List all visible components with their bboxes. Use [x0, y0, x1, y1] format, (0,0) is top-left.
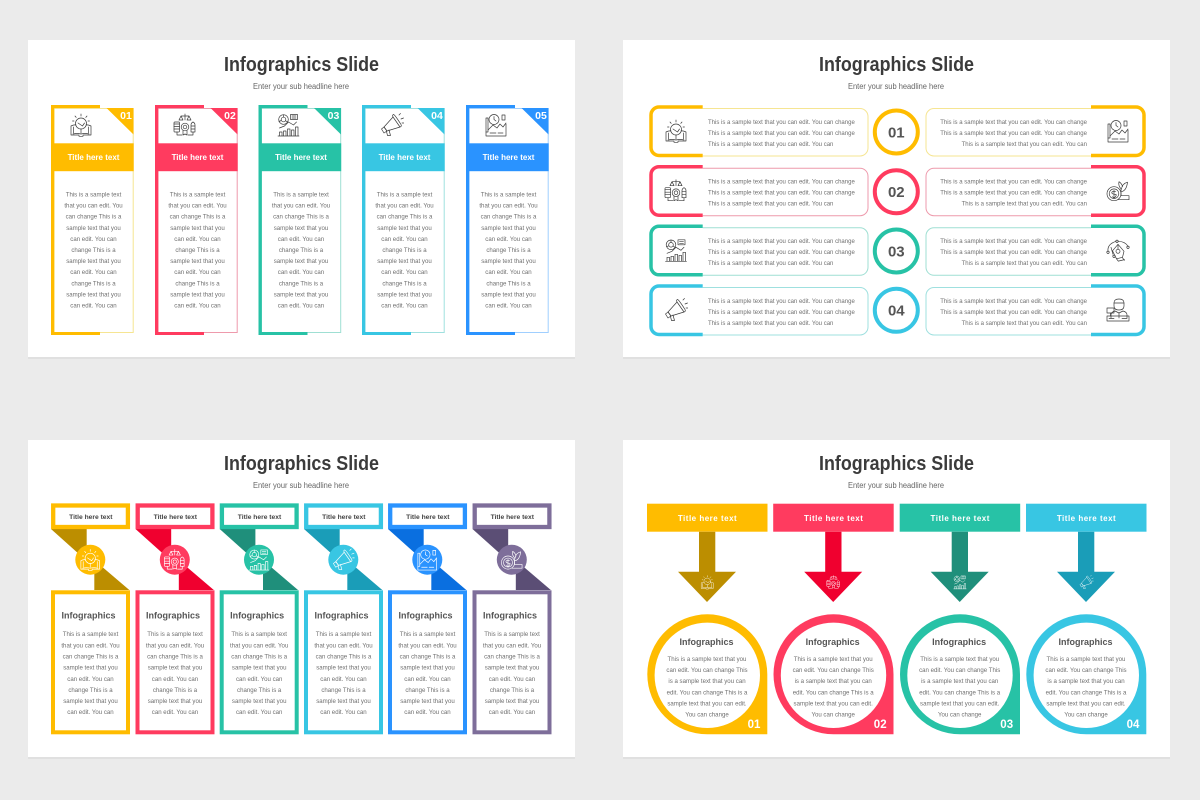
- card 03: that you can edit. You: [272, 203, 330, 210]
- column 1: sample text that you: [63, 698, 118, 705]
- left row 01: This is a sample text that you can edit. You can: [708, 142, 833, 148]
- column 3: sample text that you: [232, 665, 286, 672]
- card 02: [155, 105, 238, 335]
- card 05: change This is a: [486, 280, 531, 287]
- card 05: [466, 105, 549, 335]
- card 03: can edit. You can: [278, 236, 324, 243]
- card 01: sample text that you: [66, 291, 121, 298]
- right row 03: This is a sample text that you can edit. You can change: [940, 239, 1088, 245]
- column 5: Infographics: [398, 610, 453, 620]
- number circle 01: [875, 110, 918, 154]
- number circle 01: 01: [888, 124, 905, 141]
- left row 04: This is a sample text that you can edit. You can change: [708, 299, 855, 305]
- card 04: [362, 105, 445, 335]
- card 05: sample text that you: [481, 258, 536, 265]
- column 3: Title here text: [238, 514, 282, 521]
- card 03: can edit. You can: [278, 302, 324, 310]
- left row 01: This is a sample text that you can edit. You can change: [708, 120, 855, 126]
- column 6: [472, 506, 551, 732]
- card 02: change This is a: [175, 247, 220, 254]
- card 03: sample text that you: [274, 291, 328, 298]
- column 2: sample text that you: [148, 665, 202, 672]
- card 03: This is a sample text: [273, 192, 329, 198]
- column 4: Infographics: [314, 610, 369, 620]
- card 02: sample text that you: [170, 291, 225, 298]
- column 02: This is a sample text that you: [794, 656, 873, 663]
- column 04: 04: [1127, 719, 1140, 731]
- column 04: This is a sample text that you: [1047, 656, 1125, 663]
- column 6: This is a sample text: [484, 631, 540, 638]
- card 02: sample text that you: [170, 225, 225, 232]
- column 03: sample text that you can edit.: [920, 700, 1000, 708]
- card 02: Title here text: [172, 153, 224, 162]
- card 01: can edit. You can: [70, 302, 117, 310]
- card 04: can change This is a: [377, 214, 433, 221]
- right row 03: This is a sample text that you can edit. You can: [962, 261, 1087, 267]
- card 03: can edit. You can: [278, 269, 324, 276]
- right row 04: This is a sample text that you can edit. You can change: [940, 310, 1088, 316]
- sub headline: Enter your sub headline here: [848, 481, 945, 490]
- number circle 03: [875, 230, 918, 272]
- card 04: sample text that you: [377, 258, 432, 265]
- column 2: change This is a: [153, 687, 198, 694]
- panel: five vertical cards: [28, 40, 575, 359]
- card 01: can change This is a: [66, 214, 122, 221]
- sub headline: Enter your sub headline here: [848, 82, 945, 91]
- column 6: can edit. You can: [489, 709, 535, 716]
- card 05: can edit. You can: [485, 269, 532, 276]
- column 03: edit. You can change This is a: [919, 690, 1001, 696]
- column 3: can edit. You can: [236, 709, 282, 716]
- column 02: sample text that you can edit.: [794, 700, 873, 708]
- column 4: [304, 506, 382, 732]
- column 02: [773, 504, 894, 734]
- column 2: [136, 506, 214, 732]
- column 1: can change This is a: [63, 653, 119, 660]
- right row 02: This is a sample text that you can edit. You can change: [940, 180, 1088, 186]
- column 2: This is a sample text: [147, 631, 203, 638]
- right row 02: This is a sample text that you can edit. You can: [962, 202, 1087, 208]
- column 03: You can change: [938, 712, 982, 718]
- card 03: change This is a: [279, 280, 324, 287]
- column 1: Infographics: [61, 610, 116, 620]
- column 1: [51, 506, 129, 732]
- column 02: can edit. You can change This: [793, 667, 874, 674]
- card 05: can edit. You can: [485, 302, 532, 310]
- column 5: Title here text: [406, 514, 450, 521]
- card 04: can edit. You can: [381, 269, 428, 276]
- column 3: can edit. You can: [236, 676, 282, 683]
- column 04: edit. You can change This is a: [1046, 690, 1127, 696]
- left row 03: This is a sample text that you can edit. You can: [708, 261, 833, 267]
- column 04: Infographics: [1058, 637, 1113, 647]
- card 03: change This is a: [279, 247, 324, 254]
- column 2: can change This is a: [147, 653, 204, 660]
- left row 03: This is a sample text that you can edit. You can change: [708, 239, 855, 245]
- column 02: You can change: [811, 712, 856, 718]
- card 05: Title here text: [483, 153, 535, 162]
- card 02: can edit. You can: [174, 236, 221, 243]
- card 02: can edit. You can: [174, 269, 221, 276]
- card 02: 02: [224, 110, 236, 122]
- column 01: This is a sample text that you: [668, 656, 746, 663]
- card 02: sample text that you: [170, 258, 225, 265]
- panel: arrows and circles: [623, 440, 1170, 759]
- column 01: [647, 504, 768, 734]
- column 1: This is a sample text: [63, 631, 119, 638]
- card 05: can change This is a: [481, 214, 537, 221]
- card 04: can edit. You can: [381, 302, 428, 310]
- column 04: [1026, 504, 1146, 734]
- column 5: sample text that you: [400, 698, 455, 705]
- card 01: can edit. You can: [70, 236, 117, 243]
- card 05: can edit. You can: [485, 236, 532, 243]
- column 6: Title here text: [491, 514, 535, 521]
- column 2: sample text that you: [148, 698, 202, 705]
- left row 02: [651, 167, 868, 216]
- column 4: sample text that you: [316, 698, 371, 705]
- column 5: that you can edit. You: [398, 642, 457, 649]
- card 03: can change This is a: [273, 214, 330, 221]
- right row 02: [926, 167, 1144, 216]
- card 04: change This is a: [382, 280, 427, 287]
- column 4: sample text that you: [316, 665, 371, 672]
- heading: Infographics Slide: [819, 453, 974, 475]
- number circle 03: 03: [888, 243, 905, 260]
- column 03: 03: [1000, 719, 1013, 731]
- column 3: sample text that you: [232, 698, 286, 705]
- right row 01: This is a sample text that you can edit. You can change: [940, 120, 1088, 126]
- column 6: can change This is a: [484, 653, 541, 660]
- card 02: can change This is a: [170, 214, 226, 221]
- column 6: change This is a: [490, 687, 535, 694]
- column 03: is a sample text that you can: [921, 678, 998, 685]
- panel: six connector columns: [28, 440, 575, 759]
- card 01: This is a sample text: [66, 192, 122, 198]
- column 03: [900, 504, 1020, 734]
- column 01: 01: [748, 719, 761, 731]
- column 1: change This is a: [68, 687, 113, 694]
- column 4: that you can edit. You: [314, 642, 373, 649]
- column 03: This is a sample text that you: [920, 656, 999, 663]
- card 04: can edit. You can: [381, 236, 428, 243]
- column 04: can edit. You can change This: [1045, 667, 1127, 674]
- column 4: Title here text: [322, 514, 366, 521]
- card 05: sample text that you: [481, 225, 536, 232]
- column 01: sample text that you can edit.: [667, 700, 747, 708]
- column 2: Infographics: [146, 610, 200, 620]
- sub headline: Enter your sub headline here: [253, 82, 350, 91]
- card 05: This is a sample text: [481, 192, 537, 198]
- card 03: 03: [328, 110, 339, 122]
- card 04: sample text that you: [377, 225, 432, 232]
- column 6: sample text that you: [485, 665, 539, 672]
- card 02: can edit. You can: [174, 302, 221, 310]
- column 1: can edit. You can: [67, 709, 114, 716]
- panel: numbered rows: [623, 40, 1170, 359]
- column 4: This is a sample text: [316, 631, 372, 638]
- card 03: [258, 105, 341, 335]
- left row 03: [651, 226, 868, 275]
- card 01: [51, 105, 134, 335]
- column 5: sample text that you: [400, 665, 455, 672]
- column 02: is a sample text that you can: [795, 678, 872, 685]
- column 1: that you can edit. You: [61, 642, 120, 649]
- left row 01: This is a sample text that you can edit. You can change: [708, 131, 855, 137]
- left row 02: This is a sample text that you can edit. You can change: [708, 191, 855, 197]
- right row 01: This is a sample text that you can edit. You can: [962, 142, 1087, 148]
- column 04: You can change: [1064, 712, 1108, 718]
- column 02: 02: [874, 719, 887, 731]
- column 01: can edit. You can change This: [666, 667, 748, 674]
- column 3: change This is a: [237, 687, 282, 694]
- column 4: can edit. You can: [320, 709, 367, 716]
- heading: Infographics Slide: [224, 54, 379, 76]
- card 03: Title here text: [275, 153, 327, 162]
- number circle 02: [875, 170, 918, 213]
- column 01: Infographics: [679, 637, 734, 647]
- card 05: 05: [535, 110, 547, 122]
- card 01: Title here text: [68, 153, 120, 162]
- card 05: sample text that you: [481, 291, 536, 298]
- column 01: Title here text: [678, 514, 737, 523]
- left row 01: [651, 107, 868, 156]
- card 01: can edit. You can: [70, 269, 117, 276]
- column 4: can change This is a: [316, 653, 372, 660]
- right row 04: This is a sample text that you can edit. You can: [962, 321, 1087, 327]
- heading: Infographics Slide: [224, 453, 379, 475]
- column 5: can edit. You can: [404, 709, 451, 716]
- left row 04: This is a sample text that you can edit. You can: [708, 321, 833, 327]
- right row 01: [926, 107, 1144, 156]
- column 5: [388, 506, 466, 732]
- column 3: can change This is a: [231, 653, 288, 660]
- card 01: sample text that you: [66, 225, 121, 232]
- right row 03: [926, 226, 1144, 275]
- column 03: Title here text: [931, 514, 990, 523]
- column 3: that you can edit. You: [230, 642, 288, 649]
- card 01: 01: [120, 110, 132, 122]
- right row 04: This is a sample text that you can edit. You can change: [940, 299, 1088, 305]
- column 2: that you can edit. You: [146, 642, 204, 649]
- column 1: sample text that you: [63, 665, 118, 672]
- column 03: Infographics: [932, 637, 986, 647]
- column 04: Title here text: [1057, 514, 1116, 523]
- column 02: Title here text: [804, 514, 863, 523]
- column 4: can edit. You can: [320, 676, 367, 683]
- card 05: that you can edit. You: [479, 203, 538, 210]
- number circle 04: 04: [888, 303, 905, 320]
- column 2: Title here text: [154, 514, 198, 521]
- column 1: can edit. You can: [67, 676, 114, 683]
- card 02: This is a sample text: [170, 192, 226, 198]
- column 02: Infographics: [806, 637, 860, 647]
- right row 01: This is a sample text that you can edit. You can change: [940, 131, 1088, 137]
- column 01: is a sample text that you can: [668, 678, 746, 685]
- column 5: change This is a: [405, 687, 450, 694]
- column 5: can edit. You can: [404, 676, 451, 683]
- card 01: that you can edit. You: [64, 203, 123, 210]
- card 01: change This is a: [71, 247, 116, 254]
- column 04: sample text that you can edit.: [1046, 700, 1126, 708]
- column 6: can edit. You can: [489, 676, 535, 683]
- column 02: edit. You can change This is a: [793, 690, 874, 696]
- column 6: Infographics: [483, 610, 537, 620]
- card 04: that you can edit. You: [375, 203, 434, 210]
- right row 04: [926, 286, 1144, 335]
- sub headline: Enter your sub headline here: [253, 481, 350, 490]
- left row 03: This is a sample text that you can edit. You can change: [708, 250, 855, 256]
- card 01: sample text that you: [66, 258, 121, 265]
- number circle 02: 02: [888, 184, 905, 201]
- column 01: edit. You can change This is a: [667, 690, 748, 696]
- card 01: change This is a: [71, 280, 116, 287]
- card 05: change This is a: [486, 247, 531, 254]
- card 02: change This is a: [175, 280, 220, 287]
- card 03: sample text that you: [274, 258, 328, 265]
- card 04: This is a sample text: [377, 192, 433, 198]
- right row 03: This is a sample text that you can edit. You can change: [940, 250, 1088, 256]
- left row 02: This is a sample text that you can edit. You can change: [708, 180, 855, 186]
- column 01: You can change: [685, 712, 729, 718]
- column 6: sample text that you: [485, 698, 539, 705]
- column 2: can edit. You can: [152, 709, 198, 716]
- card 04: sample text that you: [377, 291, 432, 298]
- column 6: that you can edit. You: [483, 642, 541, 649]
- left row 02: This is a sample text that you can edit. You can: [708, 202, 833, 208]
- column 03: can edit. You can change This: [919, 667, 1000, 674]
- column 4: change This is a: [321, 687, 366, 694]
- card 03: sample text that you: [274, 225, 328, 232]
- heading: Infographics Slide: [819, 54, 974, 76]
- left row 04: [651, 286, 868, 335]
- right row 02: This is a sample text that you can edit. You can change: [940, 191, 1088, 197]
- column 2: can edit. You can: [152, 676, 198, 683]
- column 5: can change This is a: [400, 653, 456, 660]
- column 3: This is a sample text: [231, 631, 287, 638]
- column 5: This is a sample text: [400, 631, 456, 638]
- card 02: that you can edit. You: [168, 203, 227, 210]
- column 04: is a sample text that you can: [1047, 678, 1125, 685]
- card 04: 04: [431, 110, 443, 122]
- card 04: Title here text: [379, 153, 431, 162]
- column 3: [220, 506, 298, 732]
- card 04: change This is a: [382, 247, 427, 254]
- column 1: Title here text: [69, 514, 113, 521]
- column 3: Infographics: [230, 610, 284, 620]
- number circle 04: [875, 289, 918, 332]
- left row 04: This is a sample text that you can edit. You can change: [708, 310, 855, 316]
